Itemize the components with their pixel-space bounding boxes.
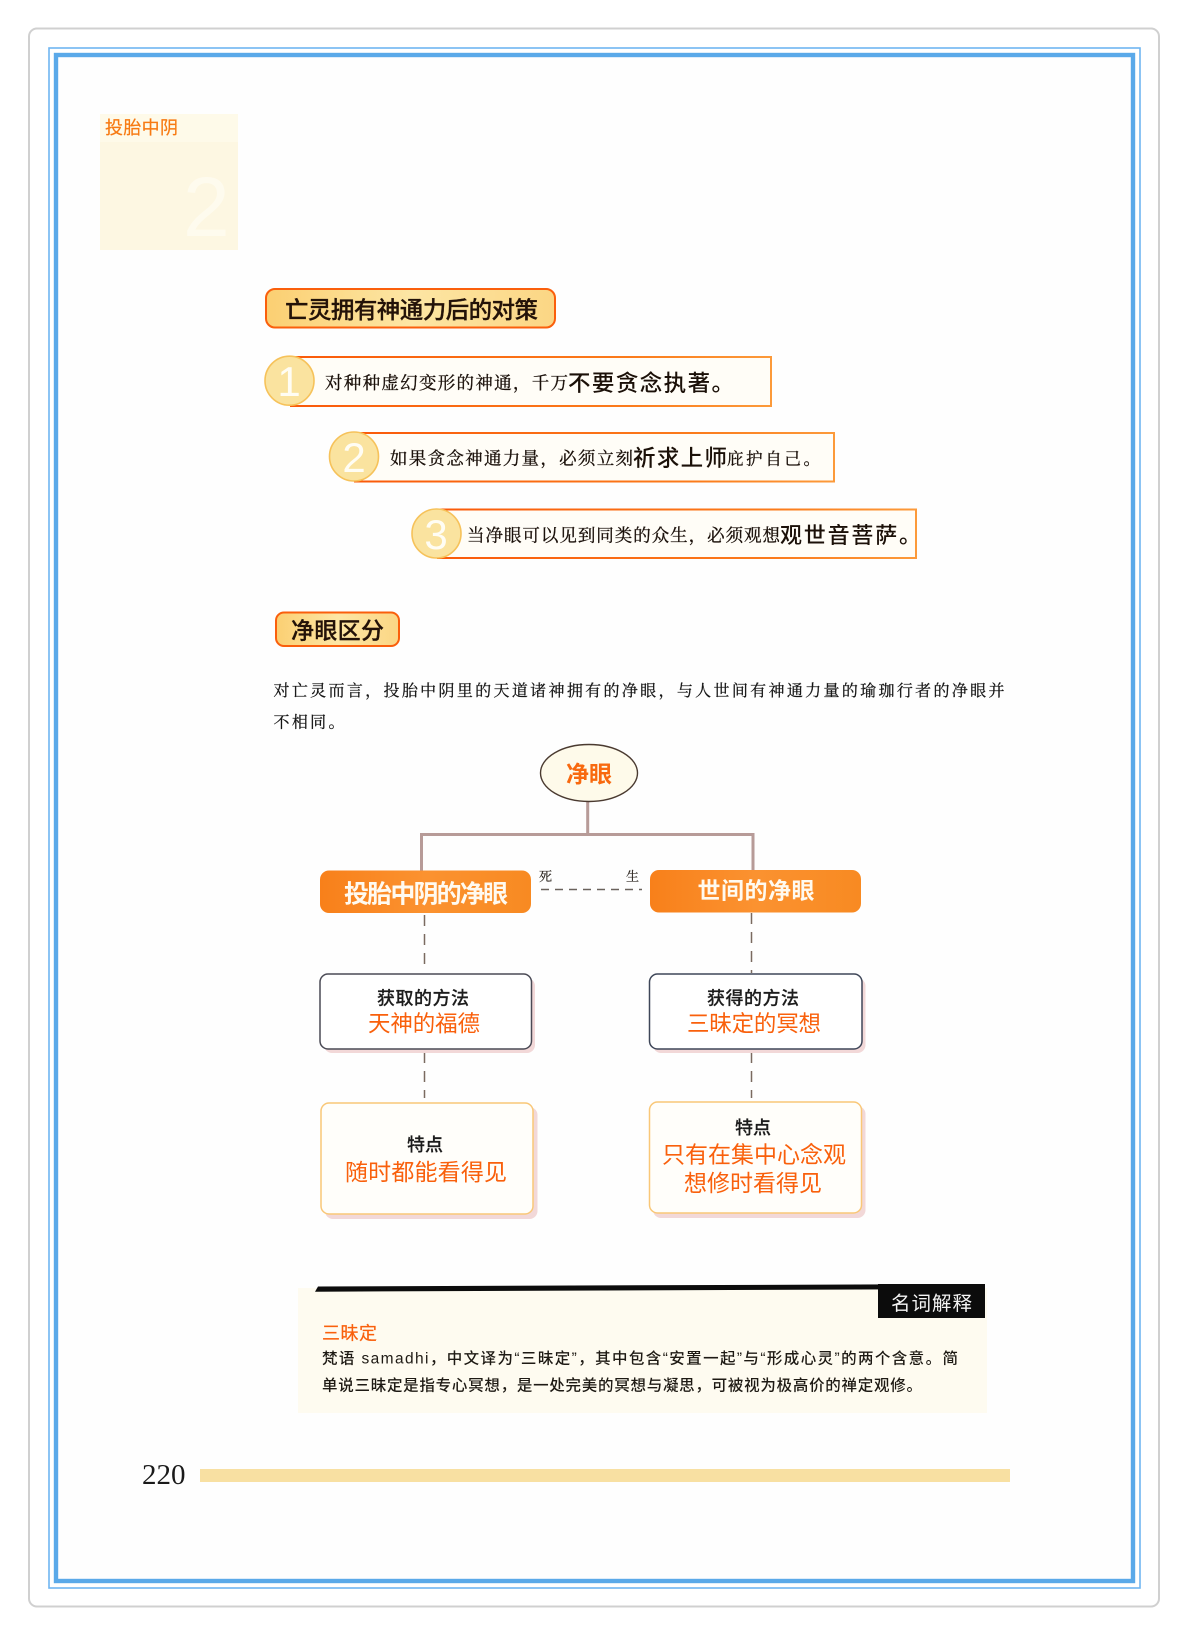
glossary top bar bbox=[315, 1284, 985, 1292]
step 1 badge: 1 bbox=[277, 358, 301, 405]
tree connectors bbox=[422, 801, 753, 871]
node: bardo pure eye: 投胎中阴的净眼 bbox=[344, 880, 508, 908]
intro paragraph: 对亡灵而言，投胎中阴里的天道诸神拥有的净眼，与人世间有神通力量的瑜珈行者的净眼并 bbox=[274, 682, 1004, 700]
heading: countermeasures: 亡灵拥有神通力后的对策 bbox=[285, 297, 538, 323]
step 1 text bbox=[325, 370, 734, 396]
step 2 text: 如果贪念神通力量，必须立刻 bbox=[390, 448, 633, 468]
intro paragraph bbox=[274, 682, 1004, 732]
glossary term: 三昧定 bbox=[322, 1324, 377, 1344]
card: left method: 获取的方法 bbox=[377, 988, 469, 1008]
step 3 text: 观世音菩萨。 bbox=[780, 523, 921, 548]
heading: distinguishing pure eye: 净眼区分 bbox=[291, 618, 384, 644]
step 3 badge bbox=[412, 509, 461, 558]
glossary tag: 名词解释 bbox=[891, 1293, 972, 1315]
card: right trait bbox=[650, 1102, 866, 1218]
node: worldly pure eye bbox=[650, 870, 861, 912]
heading: distinguishing pure eye bbox=[276, 612, 399, 646]
step 1 badge bbox=[265, 356, 314, 405]
chapter tab bbox=[100, 114, 238, 250]
death to birth link bbox=[539, 869, 642, 890]
card: right method: 三昧定的冥想 bbox=[687, 1012, 821, 1036]
root node bbox=[540, 744, 638, 802]
step 3 bbox=[412, 509, 921, 558]
node: worldly pure eye: 世间的净眼 bbox=[698, 878, 814, 904]
step 2 text: 祈求上师 bbox=[633, 446, 727, 471]
glossary tag bbox=[878, 1284, 985, 1318]
step 3 text bbox=[467, 523, 921, 548]
card: right trait: 想修时看得见 bbox=[684, 1170, 822, 1196]
card: right method bbox=[650, 974, 866, 1053]
heading: countermeasures bbox=[266, 289, 555, 328]
card: left trait: 特点 bbox=[407, 1135, 443, 1155]
death to birth link: 死 bbox=[539, 869, 552, 884]
step 2 badge bbox=[330, 432, 378, 481]
chapter tab title: 投胎中阴 bbox=[105, 118, 178, 138]
glossary definition: 单说三昧定是指专心冥想，是一处完美的冥想与凝思，可被视为极高价的禅定观修。 bbox=[322, 1376, 922, 1394]
card: right trait: 只有在集中心念观 bbox=[662, 1142, 846, 1168]
death to birth link: 生 bbox=[626, 869, 639, 884]
glossary definition: 梵语 samadhi，中文译为“三昧定”，其中包含“安置一起”与“形成心灵”的两个含意。简 bbox=[322, 1348, 958, 1368]
glossary panel bbox=[298, 1284, 987, 1413]
card: left method: 天神的福德 bbox=[368, 1012, 480, 1036]
intro paragraph: 不相同。 bbox=[274, 714, 344, 732]
step 2 text: 庇护自己。 bbox=[727, 450, 820, 468]
step 3 badge: 3 bbox=[424, 511, 448, 558]
step 2 text bbox=[390, 446, 820, 471]
step 3 text: 当净眼可以见到同类的众生，必须观想 bbox=[467, 526, 780, 546]
step 1 text: 对种种虚幻变形的神通，千万 bbox=[325, 373, 568, 393]
step 2 badge: 2 bbox=[342, 434, 366, 481]
chapter number: 2 bbox=[183, 160, 230, 254]
step 1 text: 不要贪念执著。 bbox=[568, 370, 734, 396]
card: right trait: 特点 bbox=[735, 1118, 771, 1138]
page number: 220 bbox=[142, 1459, 186, 1491]
card: right method: 获得的方法 bbox=[707, 988, 799, 1008]
root node: 净眼 bbox=[566, 761, 612, 787]
step 1 bbox=[265, 356, 771, 406]
node: bardo pure eye bbox=[320, 870, 531, 913]
card: left trait bbox=[321, 1103, 538, 1219]
dashed connectors bbox=[424, 913, 752, 1098]
glossary definition bbox=[322, 1348, 958, 1394]
step 2 bbox=[330, 432, 834, 482]
card: left trait: 随时都能看得见 bbox=[345, 1159, 507, 1185]
footer bar bbox=[200, 1469, 1010, 1482]
card: left method bbox=[320, 974, 535, 1053]
